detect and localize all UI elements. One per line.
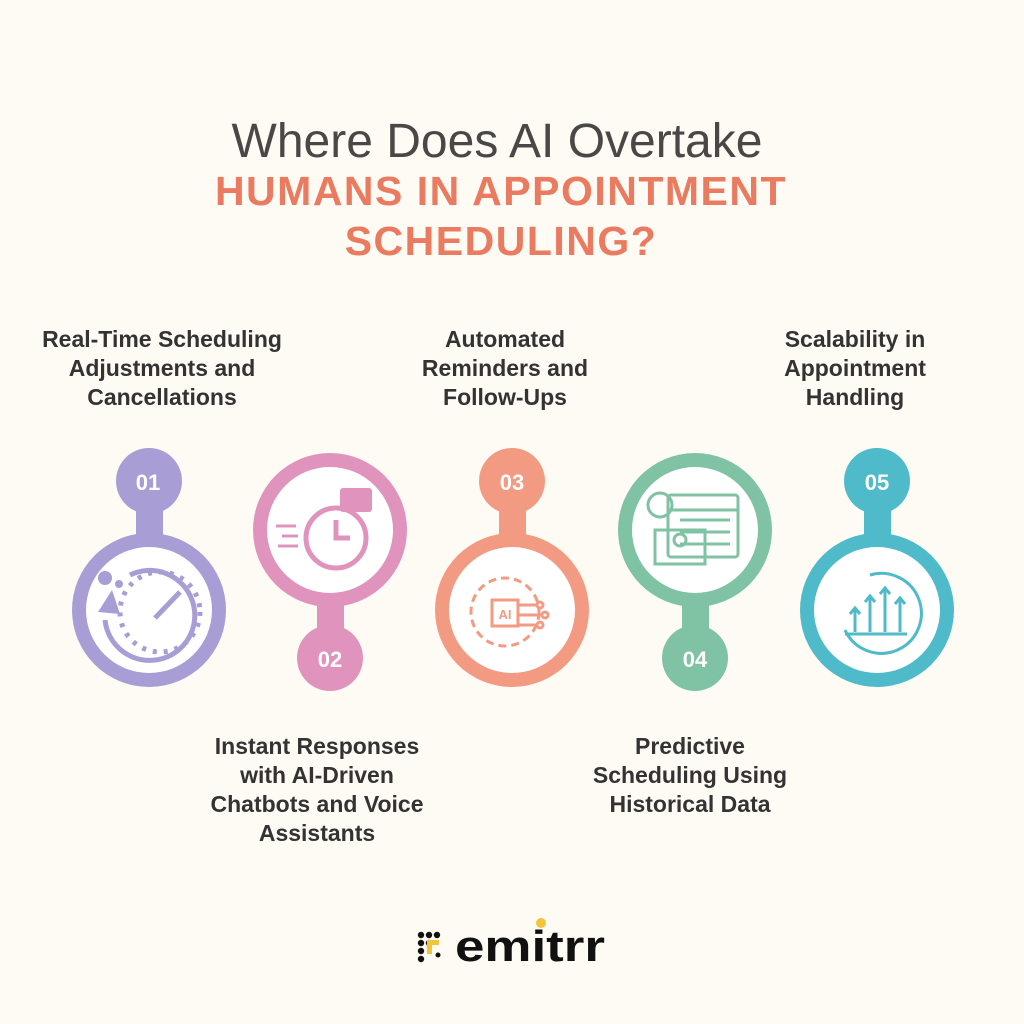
step 2 [253, 453, 407, 691]
label 4 [593, 733, 787, 817]
step 5 [800, 448, 954, 687]
step 4 [618, 453, 772, 691]
label 3: Automated [445, 326, 565, 352]
label 2 [210, 733, 424, 846]
label 3: Reminders and [422, 355, 588, 381]
label 2: Instant Responses [215, 733, 419, 759]
logo: emitrr [455, 922, 605, 971]
title: Where Does AI Overtake [232, 115, 762, 168]
label 3 [422, 326, 588, 410]
label 5 [784, 326, 926, 410]
icon: gauge [105, 570, 200, 660]
icon: growth arrows [845, 573, 921, 653]
step 2: 02 [318, 647, 342, 672]
subtitle: SCHEDULING? [345, 218, 657, 264]
step 4: 04 [683, 647, 708, 672]
label 4: Scheduling Using [593, 762, 787, 788]
label 2: Chatbots and Voice [210, 791, 424, 817]
label 1: Real-Time Scheduling [42, 326, 282, 352]
step 1: 01 [136, 470, 160, 495]
label 1: Cancellations [87, 384, 237, 410]
label 4: Historical Data [609, 791, 771, 817]
label 2: with AI-Driven [240, 762, 394, 788]
step 3 [435, 448, 589, 687]
icon: stopwatch with chat [276, 508, 366, 568]
step 1 [72, 448, 226, 687]
label 4: Predictive [635, 733, 745, 759]
label 5: Handling [806, 384, 904, 410]
label 5: Appointment [784, 355, 926, 381]
subtitle [215, 168, 787, 264]
label 2: Assistants [259, 820, 375, 846]
step 5: 05 [865, 470, 889, 495]
logo [418, 918, 605, 971]
icon: calendar with person [648, 493, 738, 564]
subtitle: HUMANS IN APPOINTMENT [215, 168, 787, 214]
step 3: AI [498, 607, 512, 622]
label 1: Adjustments and [69, 355, 255, 381]
label 3: Follow-Ups [443, 384, 567, 410]
icon: AI chip gear [471, 578, 548, 646]
label 5: Scalability in [785, 326, 925, 352]
label 1 [42, 326, 282, 410]
step 3: 03 [500, 470, 524, 495]
